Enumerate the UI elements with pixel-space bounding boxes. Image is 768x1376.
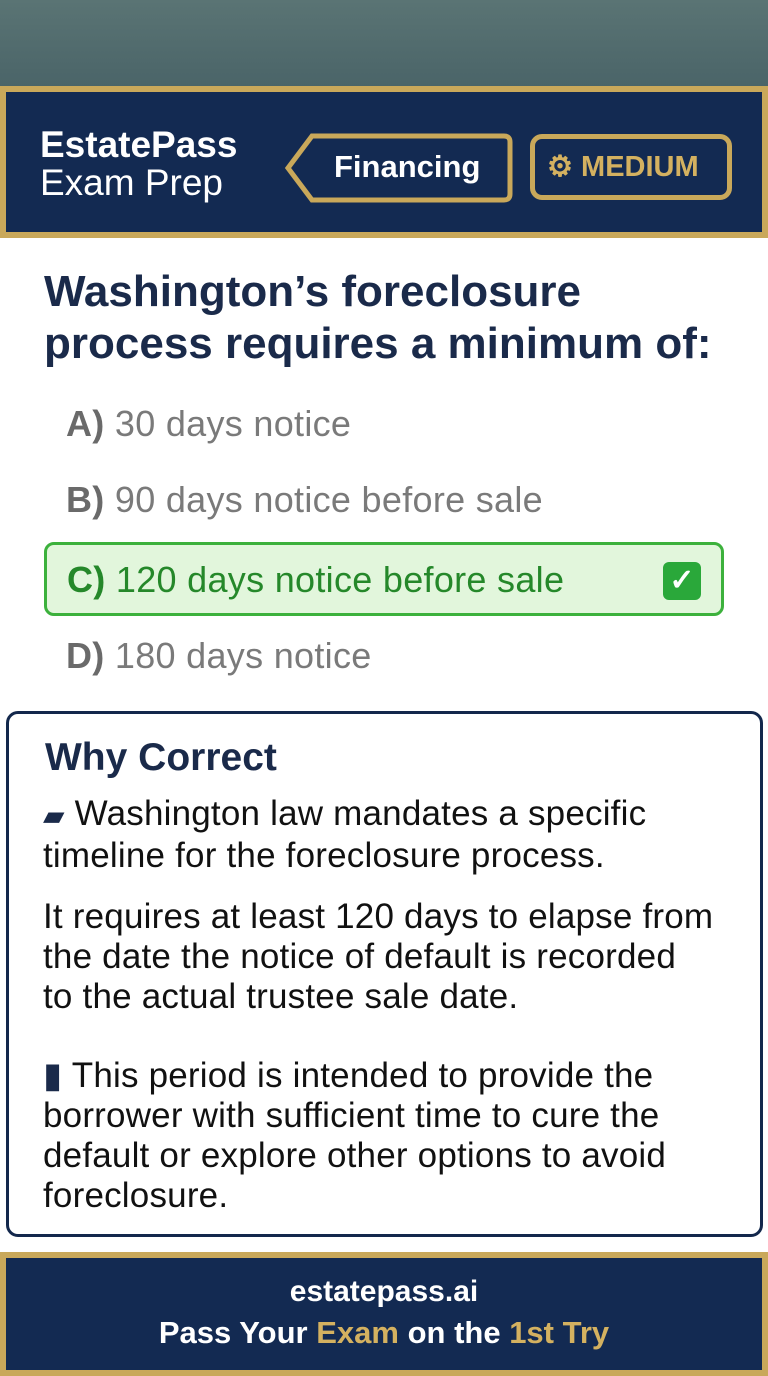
explanation text 1 [43, 794, 646, 875]
option A: A) 30 days notice [66, 403, 351, 444]
panel: why correct [6, 711, 763, 1237]
question: process requires a minimum of: [44, 319, 712, 368]
header [0, 86, 768, 238]
category tag: Financing: Financing [334, 149, 480, 184]
explanation text 3 [43, 1056, 666, 1215]
explanation text 3: default or explore other options to avoid [43, 1136, 666, 1175]
difficulty badge: ⚙ MEDIUM [547, 151, 699, 183]
footer: Pass Your Exam on the 1st Try [159, 1315, 609, 1350]
explanation text 2: the date the notice of default is recorded [43, 937, 676, 976]
explanation text 2: It requires at least 120 days to elapse from [43, 897, 713, 936]
brand: Exam Prep [40, 162, 223, 203]
brand [40, 124, 237, 203]
explanation text 3: borrower with sufficient time to cure the [43, 1096, 659, 1135]
icon: check: ✓ [669, 564, 695, 597]
icon: check [663, 562, 701, 600]
difficulty badge [530, 134, 732, 200]
explanation text 2: to the actual trustee sale date. [43, 977, 518, 1016]
question: Washington’s foreclosure [44, 267, 581, 316]
option B: B) 90 days notice before sale [66, 479, 543, 520]
brand: EstatePass [40, 124, 237, 165]
question [44, 267, 712, 368]
explanation text 1: timeline for the foreclosure process. [43, 836, 605, 875]
option C correct: C) 120 days notice before sale [67, 559, 564, 600]
option C correct [44, 542, 724, 616]
top band [0, 0, 768, 88]
option D: D) 180 days notice [66, 635, 372, 676]
explanation text 1: ▰ Washington law mandates a specific [43, 794, 646, 833]
footer: estatepass.ai [290, 1275, 478, 1308]
footer [0, 1252, 768, 1376]
explanation text 3: foreclosure. [43, 1176, 228, 1215]
explanation text 3: ▮ This period is intended to provide the [43, 1056, 653, 1095]
category tag: Financing [285, 134, 512, 202]
explanation text 2 [43, 897, 713, 1016]
heading: Why Correct [45, 736, 277, 779]
